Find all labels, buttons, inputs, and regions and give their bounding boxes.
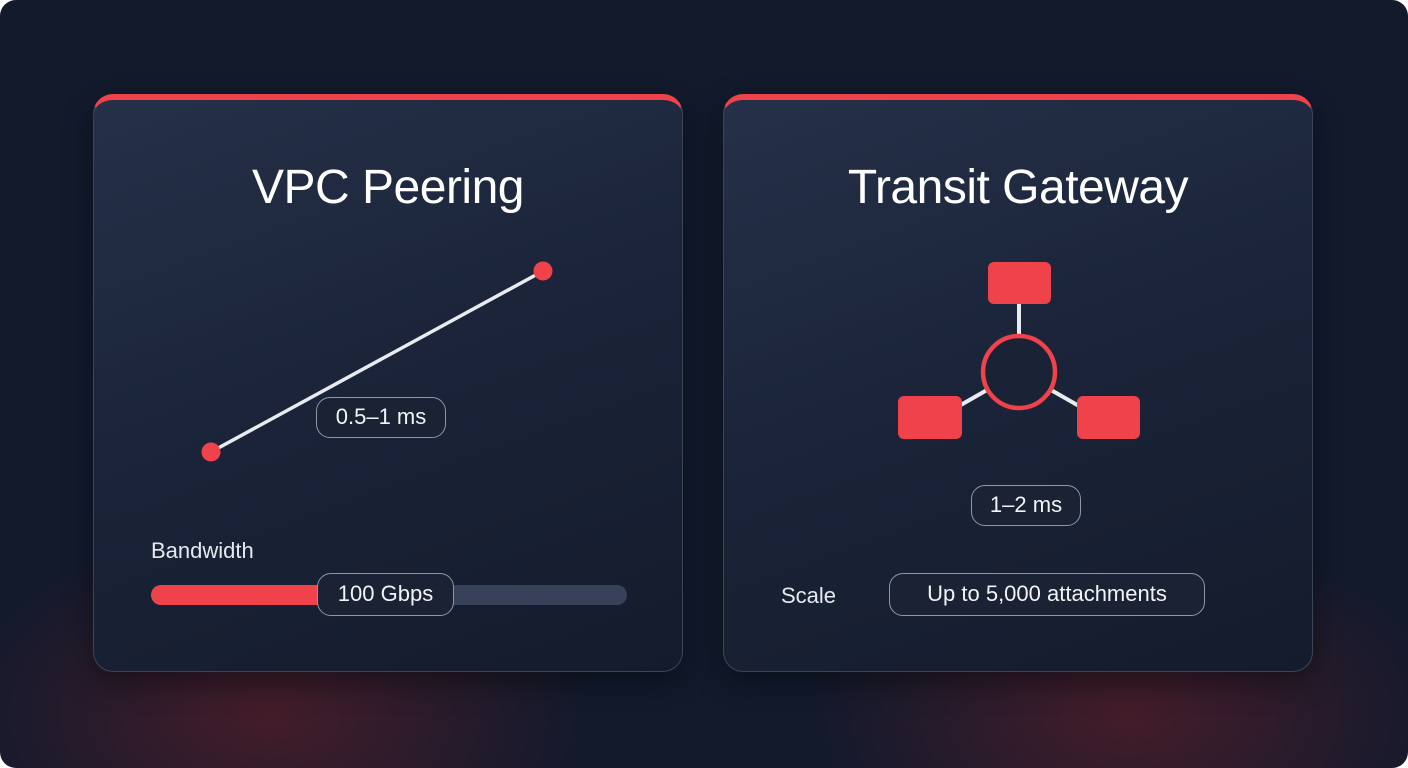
label: Scale: Scale [781, 583, 836, 608]
bandwidth pill [317, 573, 454, 616]
scale pill: Up to 5,000 attachments [927, 581, 1167, 606]
label: Bandwidth: Bandwidth [151, 538, 254, 563]
bandwidth pill: 100 Gbps [338, 581, 433, 606]
chart: peering line [202, 262, 552, 462]
latency pill: 1–2 ms [990, 492, 1062, 517]
bar: bandwidth [151, 585, 627, 605]
heading: VPC Peering: VPC Peering [252, 161, 524, 214]
scale pill [889, 573, 1205, 616]
latency pill: 0.5–1 ms [336, 404, 426, 429]
panel: Transit Gateway [723, 94, 1313, 672]
panel: VPC Peering [93, 94, 683, 672]
latency pill [316, 397, 446, 438]
heading: Transit Gateway: Transit Gateway [848, 161, 1188, 214]
latency pill [971, 485, 1081, 526]
diagram: hub and spokes [898, 262, 1140, 439]
